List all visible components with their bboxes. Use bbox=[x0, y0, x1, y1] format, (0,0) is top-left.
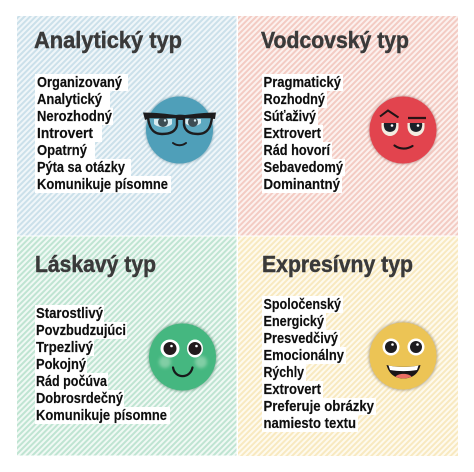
trait list: Analytický typ: Pýta sa otázky bbox=[37, 160, 126, 176]
trait list: Expresívny typ: Preferuje obrázky bbox=[264, 399, 375, 415]
trait list: Analytický typ: Nerozhodný bbox=[37, 109, 113, 125]
trait list: Analytický typ: Komunikuje písomne bbox=[37, 177, 168, 193]
panel: Láskavý typ bbox=[17, 236, 236, 456]
trait list: Láskavý typ: Rád počúva bbox=[36, 374, 108, 390]
heading: Expresívny typ: Expresívny typ bbox=[262, 251, 413, 277]
trait list: Vodcovský typ: Sebavedomý bbox=[264, 160, 344, 176]
trait list: Analytický typ bbox=[35, 74, 171, 193]
trait list: Expresívny typ: Energický bbox=[264, 314, 325, 330]
trait list: Láskavý typ: Pokojný bbox=[36, 357, 87, 373]
heading: Analytický typ: Analytický typ bbox=[34, 27, 182, 53]
trait list: Analytický typ: Opatrný bbox=[37, 143, 88, 159]
trait list: Láskavý typ: Povzbudzujúci bbox=[36, 323, 126, 339]
trait list: Vodcovský typ: Extrovert bbox=[264, 126, 321, 142]
icon: blue face with glasses bbox=[143, 96, 216, 164]
trait list: Expresívny typ: namiesto textu bbox=[264, 416, 356, 432]
trait list: Analytický typ: Organizovaný bbox=[37, 75, 123, 91]
icon: yellow laughing face bbox=[368, 322, 438, 390]
heading: Láskavý typ: Láskavý typ bbox=[35, 251, 156, 277]
panel: Expresívny typ bbox=[238, 236, 458, 456]
trait list: Láskavý typ: Dobrosrdečný bbox=[36, 391, 124, 407]
icon: red face with raised eyebrow bbox=[369, 96, 437, 164]
trait list: Vodcovský typ: Súťaživý bbox=[264, 109, 317, 125]
trait list: Láskavý typ bbox=[35, 305, 170, 424]
trait list: Analytický typ: Introvert bbox=[37, 126, 93, 142]
trait list: Expresívny typ: Spoločenský bbox=[264, 297, 342, 313]
trait list: Analytický typ: Analytický bbox=[37, 92, 103, 108]
trait list: Láskavý typ: Starostlivý bbox=[36, 306, 104, 322]
trait list: Expresívny typ: Rýchly bbox=[264, 365, 305, 381]
trait list: Vodcovský typ: Dominantný bbox=[264, 177, 341, 193]
panel: Vodcovský typ bbox=[238, 16, 458, 236]
trait list: Vodcovský typ bbox=[262, 74, 345, 193]
panel: Analytický typ bbox=[17, 16, 236, 236]
trait list: Láskavý typ: Komunikuje písomne bbox=[36, 408, 167, 424]
trait list: Vodcovský typ: Rád hovorí bbox=[264, 143, 331, 159]
trait list: Vodcovský typ: Pragmatický bbox=[264, 75, 342, 91]
trait list: Expresívny typ: Emocionálny bbox=[264, 348, 345, 364]
trait list: Vodcovský typ: Rozhodný bbox=[264, 92, 326, 108]
trait list: Expresívny typ: Presvedčivý bbox=[264, 331, 339, 347]
trait list: Expresívny typ: Extrovert bbox=[264, 382, 321, 398]
trait list: Expresívny typ bbox=[262, 296, 376, 432]
heading: Vodcovský typ: Vodcovský typ bbox=[261, 27, 409, 53]
trait list: Láskavý typ: Trpezlivý bbox=[36, 340, 94, 356]
icon: green smiling face bbox=[148, 322, 217, 392]
